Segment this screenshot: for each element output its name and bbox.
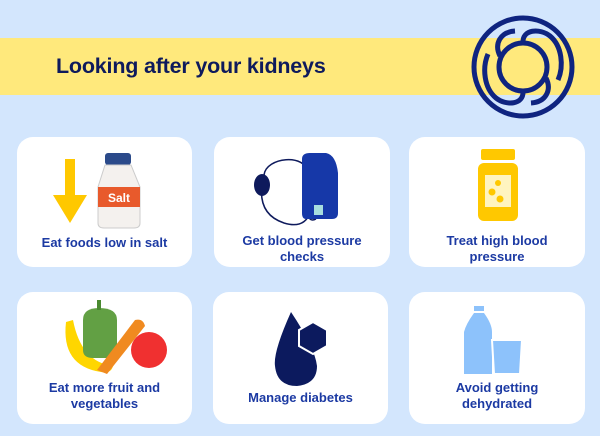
label: Treat high blood bbox=[446, 233, 548, 248]
header band bbox=[0, 38, 600, 95]
icon: down arrow bbox=[53, 159, 87, 223]
label: Manage diabetes bbox=[248, 390, 353, 405]
card: blood pressure bbox=[214, 137, 390, 267]
label: Get blood pressure bbox=[242, 233, 362, 248]
icon: fruit and vegetables bbox=[65, 300, 167, 374]
title: Looking after your kidneys bbox=[56, 54, 326, 78]
card: salt bbox=[17, 137, 192, 267]
icon: blood pressure monitor bbox=[254, 153, 338, 226]
label: pressure bbox=[470, 249, 524, 264]
label bbox=[242, 233, 362, 264]
label: Eat foods low in salt bbox=[42, 235, 167, 250]
label: Avoid getting bbox=[456, 380, 538, 395]
icon: salt shaker bbox=[98, 153, 140, 228]
icon: salt shaker: Salt bbox=[108, 191, 130, 205]
icon: pill bottle bbox=[478, 149, 518, 221]
label: Eat more fruit and bbox=[49, 380, 160, 395]
card: diabetes bbox=[213, 292, 388, 424]
card: hydration bbox=[409, 292, 585, 424]
icon: bottle and glass bbox=[464, 306, 521, 374]
icon: drop and sugar cube bbox=[274, 312, 326, 386]
label bbox=[456, 380, 538, 411]
label: vegetables bbox=[71, 396, 138, 411]
logo bbox=[472, 16, 574, 118]
label bbox=[446, 233, 548, 264]
label bbox=[49, 380, 160, 411]
card: fruit and veg bbox=[17, 292, 192, 424]
card: medication bbox=[409, 137, 585, 267]
label: checks bbox=[280, 249, 324, 264]
label: dehydrated bbox=[462, 396, 532, 411]
